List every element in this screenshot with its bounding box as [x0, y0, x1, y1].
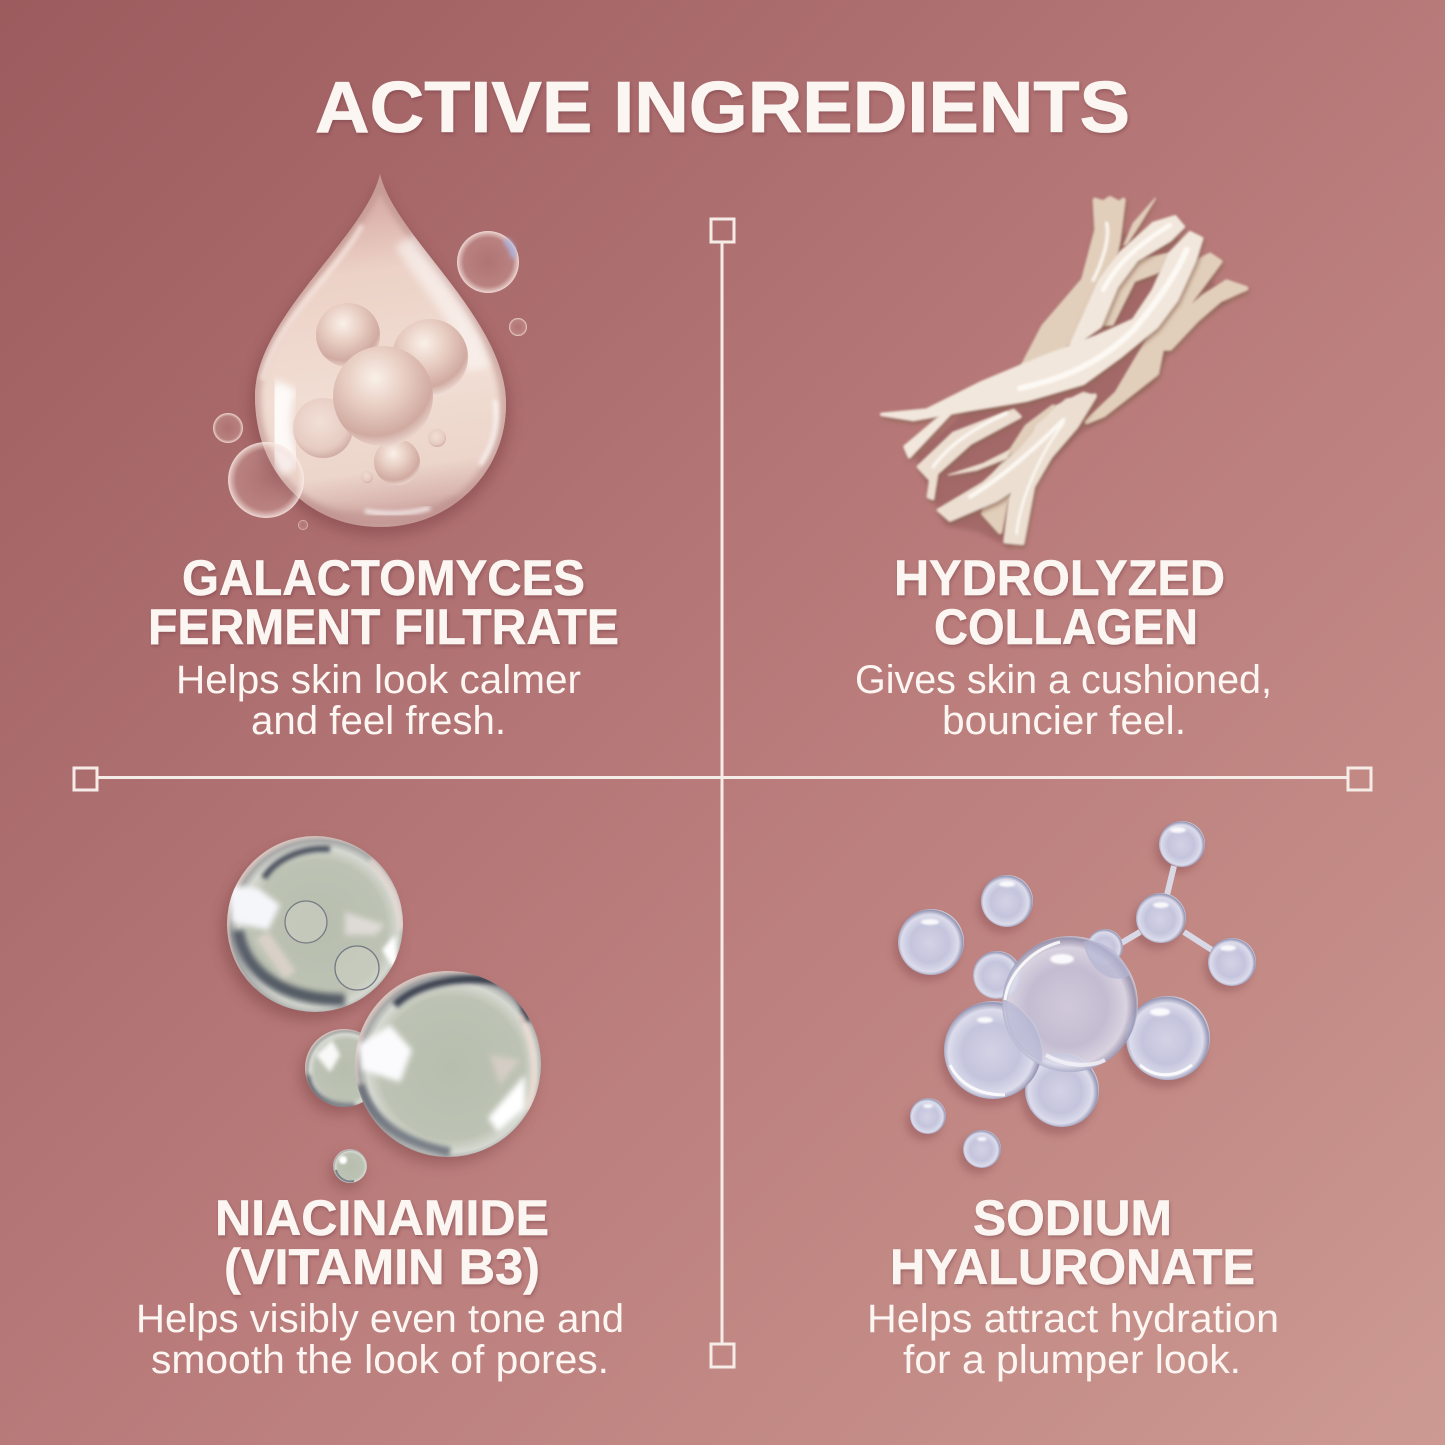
strand highlights	[933, 223, 1187, 533]
front strands	[882, 217, 1202, 457]
quadrant divider cross	[74, 219, 1371, 1367]
heading: FERMENT FILTRATE	[148, 599, 619, 655]
overlap lenses	[1005, 941, 1130, 1062]
heading: NIACINAMIDE	[215, 1190, 549, 1246]
description	[176, 658, 581, 743]
heading: HYALURONATE	[890, 1239, 1255, 1295]
lower strands	[918, 393, 1095, 543]
description	[867, 1297, 1279, 1382]
heading: GALACTOMYCES	[182, 550, 585, 606]
description: Helps visibly even tone and	[136, 1297, 624, 1341]
icon: inner pearl bubbles	[293, 303, 468, 485]
large bubble	[355, 971, 541, 1157]
icon: twisted collagen strands	[882, 198, 1246, 549]
tiny bubble	[333, 1149, 367, 1183]
description: Gives skin a cushioned,	[855, 658, 1272, 702]
strand shadow	[915, 232, 1228, 549]
heading	[894, 550, 1225, 655]
icon: floating bubbles	[213, 231, 527, 530]
description: bouncier feel.	[942, 699, 1186, 743]
molecule atoms	[1087, 821, 1256, 986]
droplet highlights	[921, 827, 1236, 1141]
heading: HYDROLYZED	[894, 550, 1225, 606]
panel: niacinamide	[136, 836, 624, 1382]
back strands	[983, 198, 1246, 532]
description	[136, 1297, 624, 1382]
icon: molecule and droplets	[894, 821, 1256, 1174]
heading	[215, 1190, 549, 1295]
bubble rims	[950, 942, 1192, 1095]
upper bubble	[227, 836, 403, 1012]
description: smooth the look of pores.	[151, 1338, 609, 1382]
panel: hydrolyzed collagen	[855, 198, 1272, 743]
icon: glass bubbles	[222, 836, 541, 1189]
panel: galactomyces ferment filtrate	[148, 174, 619, 743]
heading	[148, 550, 619, 655]
panel: sodium hyaluronate	[867, 821, 1279, 1382]
description: Helps skin look calmer	[176, 658, 581, 702]
description: Helps attract hydration	[867, 1297, 1279, 1341]
title: ACTIVE INGREDIENTS	[315, 68, 1130, 148]
molecule bonds	[1118, 866, 1212, 950]
heading	[890, 1190, 1255, 1295]
description: for a plumper look.	[903, 1338, 1241, 1382]
heading: COLLAGEN	[934, 599, 1198, 655]
droplet cluster	[898, 875, 1210, 1168]
description	[855, 658, 1272, 743]
icon: serum droplet with pearls	[213, 174, 527, 535]
heading: SODIUM	[973, 1190, 1172, 1246]
description: and feel fresh.	[251, 699, 506, 743]
heading: (VITAMIN B3)	[224, 1239, 540, 1295]
small bubble behind	[305, 1029, 363, 1107]
